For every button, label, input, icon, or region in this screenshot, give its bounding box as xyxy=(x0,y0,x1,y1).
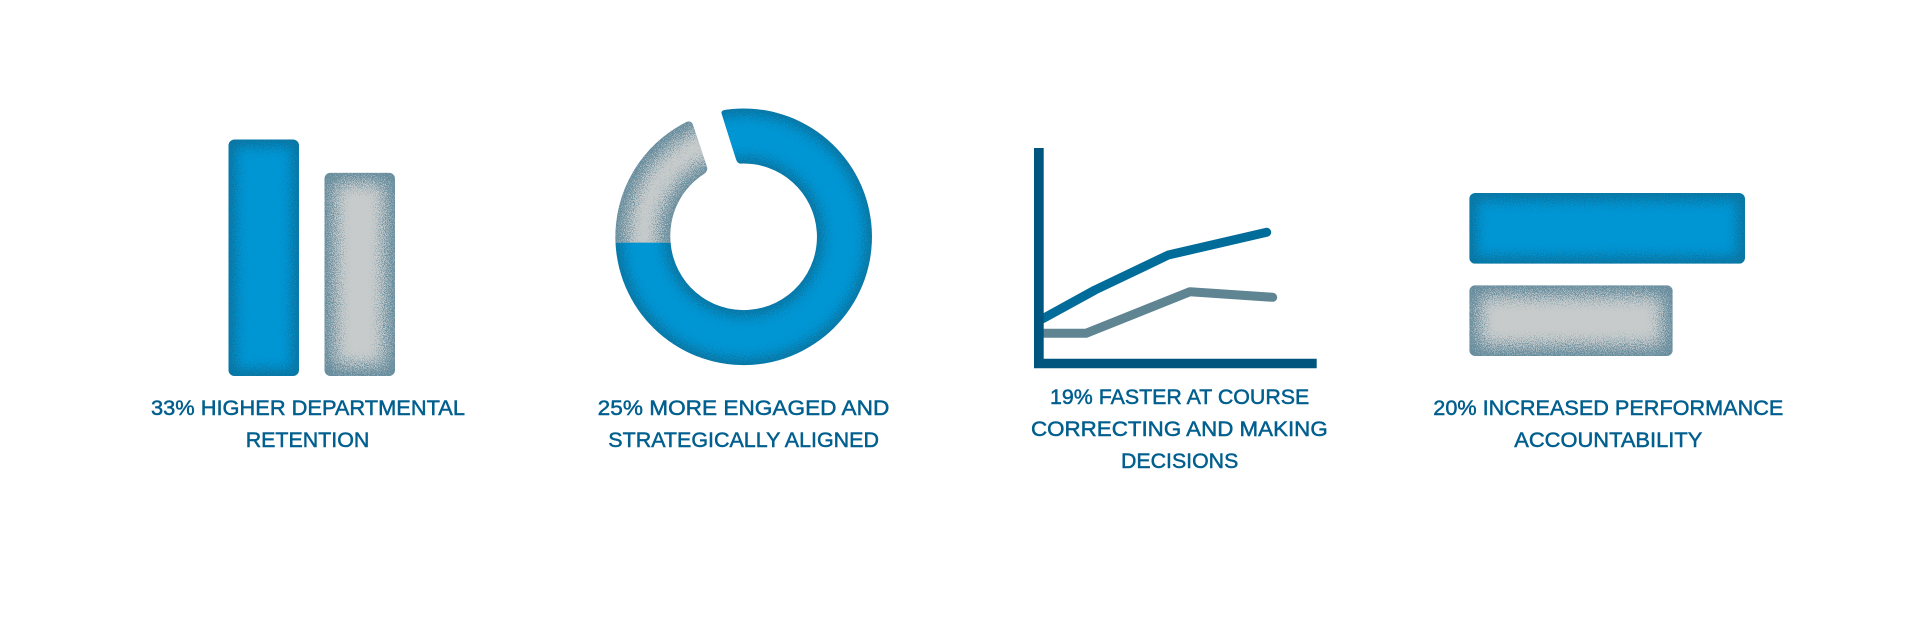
caption: accountability xyxy=(1433,396,1783,452)
blue segment xyxy=(616,108,872,366)
blue line xyxy=(1043,232,1267,319)
grey line xyxy=(1043,292,1273,333)
panel: performance accountability xyxy=(1433,193,1783,452)
panel: departmental retention xyxy=(151,140,465,452)
grey segment xyxy=(615,122,708,243)
icon: donut chart xyxy=(615,108,872,366)
caption: engagement: 25% MORE ENGAGED AND xyxy=(598,396,889,420)
caption: engagement: STRATEGICALLY ALIGNED xyxy=(608,428,879,452)
caption: retention xyxy=(151,396,465,452)
caption: faster decisions: 19% FASTER AT COURSE xyxy=(1050,385,1309,409)
caption: retention: 33% HIGHER DEPARTMENTAL xyxy=(151,396,465,420)
caption: faster decisions xyxy=(1031,385,1328,473)
icon: two vertical bars xyxy=(228,140,395,376)
line chart xyxy=(1034,148,1317,368)
caption: faster decisions: DECISIONS xyxy=(1121,449,1238,473)
grey bar xyxy=(1469,285,1673,356)
caption: retention: RETENTION xyxy=(246,428,369,452)
blue bar xyxy=(228,140,299,376)
icon: two horizontal bars xyxy=(1469,193,1745,356)
panel: course correcting xyxy=(1031,148,1328,473)
caption: engagement xyxy=(598,396,889,452)
grey bar xyxy=(324,173,395,376)
caption: accountability: 20% INCREASED PERFORMANCE xyxy=(1433,396,1783,420)
panel: engagement and alignment xyxy=(598,100,890,452)
blue bar xyxy=(1469,193,1745,264)
chart axes xyxy=(1034,148,1317,368)
caption: accountability: ACCOUNTABILITY xyxy=(1514,428,1702,452)
caption: faster decisions: CORRECTING AND MAKING xyxy=(1031,417,1328,441)
